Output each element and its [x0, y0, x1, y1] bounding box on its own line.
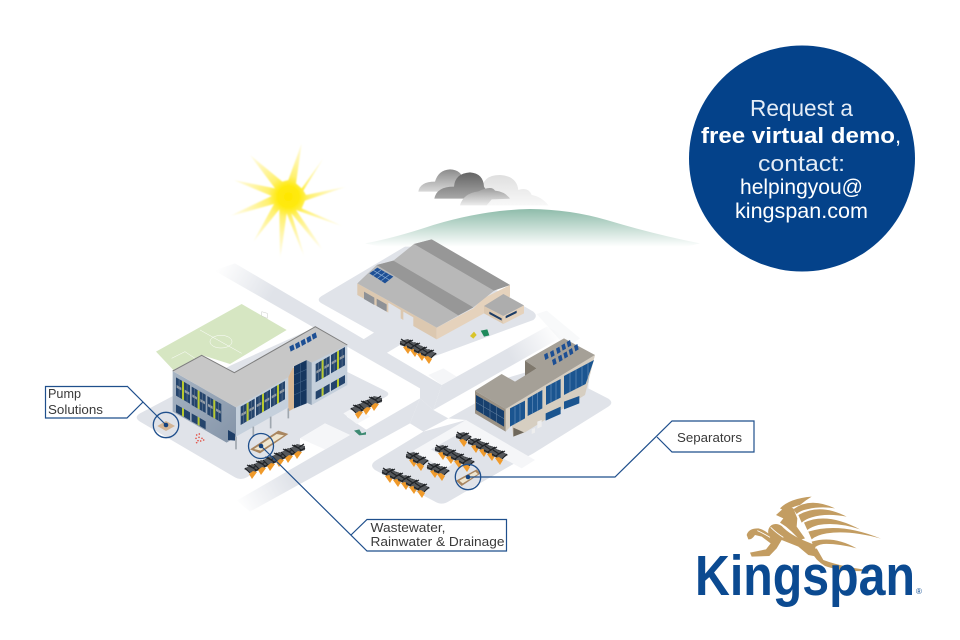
- solar panels on warehouse: [369, 268, 393, 283]
- wastewater tank: [250, 431, 288, 453]
- callout: wastewater, rainwater and drainage: Wastewater,: [370, 521, 446, 535]
- contact badge: helpingyou@: [740, 176, 863, 199]
- logo: Kingspan: Kingspan: [695, 544, 915, 607]
- clouds: [418, 169, 548, 205]
- hill: [365, 209, 700, 247]
- cars: warehouse row: [400, 339, 437, 364]
- contact badge: contact:: [758, 151, 845, 176]
- logo: lion: [747, 497, 881, 571]
- yellow forklift: [470, 332, 477, 339]
- contact badge: ,: [895, 123, 901, 148]
- logo: Kingspan: ®: [916, 587, 922, 596]
- icon: sun: [228, 143, 348, 263]
- green figure: [354, 429, 366, 435]
- cars: car park rows: [382, 432, 508, 498]
- callout: pump solutions: [46, 386, 179, 438]
- separator tank: [456, 469, 481, 486]
- ground: roads and building plots: [137, 242, 611, 512]
- logo: Kingspan: [695, 497, 922, 607]
- sports pitch: [156, 304, 287, 370]
- callout: wastewater, rainwater and drainage: [248, 434, 506, 551]
- solar panels on office: [544, 340, 579, 365]
- school windows: [176, 347, 345, 429]
- school entrance and pillars: [228, 408, 288, 449]
- pump pad: [157, 421, 175, 431]
- contact badge: Request a: [750, 95, 853, 121]
- solar panels on school: [289, 332, 317, 352]
- warehouse annex: [484, 294, 524, 324]
- contact badge: free virtual demo: [701, 123, 895, 148]
- building: warehouse: [357, 239, 524, 339]
- callout: separators: Separators: [677, 431, 742, 445]
- contact badge: [689, 46, 915, 272]
- building: school: [157, 327, 366, 453]
- callout: pump solutions: Pump: [48, 387, 81, 401]
- cars: school row: [244, 444, 305, 479]
- callout: pump solutions: Solutions: [48, 403, 103, 417]
- green vehicle: [481, 329, 489, 337]
- callout: wastewater, rainwater and drainage: Rainwater & Drainage: [370, 535, 505, 549]
- contact badge: kingspan.com: [735, 200, 868, 223]
- building: office: [475, 338, 595, 437]
- red markings: [195, 433, 204, 443]
- cars: school side row: [350, 396, 382, 419]
- callout: separators: [455, 421, 754, 490]
